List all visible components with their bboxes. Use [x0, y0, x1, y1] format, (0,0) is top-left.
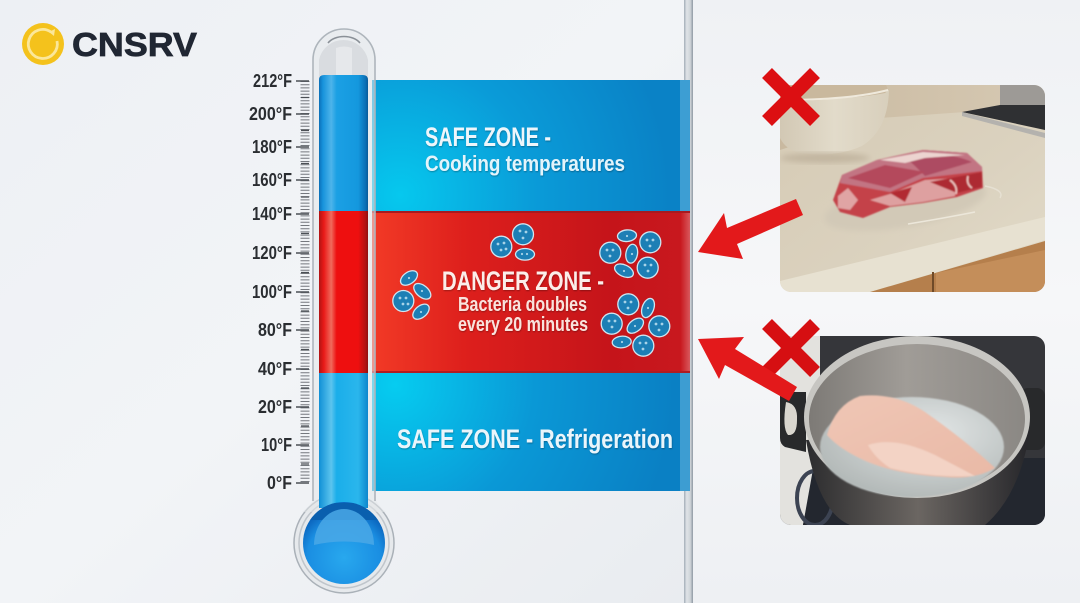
pot body — [806, 440, 1026, 525]
bowl — [780, 85, 889, 163]
water — [820, 397, 1004, 497]
thermometer bulb — [303, 502, 385, 584]
brand name: CNSRV — [72, 26, 197, 63]
safe zone: refrigeration band — [372, 373, 690, 491]
arrow: steak to danger zone — [698, 199, 803, 259]
danger zone band — [372, 211, 690, 373]
scale labels: 40°F — [258, 359, 292, 379]
temperature scale — [249, 71, 309, 493]
photo: chicken breast in boiling pot — [780, 336, 1045, 525]
mercury column: red danger section — [319, 211, 368, 373]
right handle — [1024, 388, 1045, 450]
scale labels: 212°F — [253, 71, 292, 91]
bacteria cluster: upper right — [600, 229, 661, 280]
bacteria cluster: left — [393, 268, 434, 322]
danger zone description — [458, 294, 588, 336]
scale labels — [249, 71, 292, 493]
safe zone: cooking temperatures band — [372, 80, 690, 211]
stove corner — [962, 85, 1045, 138]
bacteria cluster: lower right — [601, 294, 670, 356]
scale labels: 120°F — [252, 243, 292, 263]
bacteria cluster: top centre — [491, 224, 534, 260]
pot interior — [809, 344, 1025, 494]
danger zone description: every 20 minutes — [458, 314, 588, 336]
logo: CNSRV — [22, 23, 197, 65]
scale labels: 10°F — [261, 435, 292, 455]
scale labels: 20°F — [258, 397, 292, 417]
scale labels: 80°F — [258, 320, 292, 340]
bacteria clusters — [393, 224, 670, 356]
safe zone cooking subheading: Cooking temperatures — [425, 151, 625, 176]
danger zone description: Bacteria doubles — [458, 294, 587, 316]
steak — [833, 150, 983, 218]
icon: red X over steak — [767, 73, 815, 121]
scale labels: 100°F — [252, 282, 292, 302]
counter front edge — [780, 217, 1045, 292]
chicken breast — [827, 395, 995, 478]
pot rim — [804, 336, 1030, 498]
mercury column: upper blue — [319, 75, 368, 211]
scale labels: 200°F — [249, 104, 292, 124]
icon: yellow ring logo — [22, 23, 64, 65]
safe zone cooking heading: SAFE ZONE - — [425, 122, 551, 152]
stove glass top — [803, 458, 1045, 525]
mercury column: lower blue — [319, 373, 368, 508]
back wall — [780, 85, 1045, 150]
scale labels: 140°F — [252, 204, 292, 224]
safe zone refrigeration heading: SAFE ZONE - Refrigeration — [397, 424, 673, 454]
counter edge — [780, 336, 820, 525]
panel: temperature zones — [372, 80, 690, 491]
scale labels: 0°F — [267, 473, 292, 493]
danger zone heading: DANGER ZONE - — [442, 266, 604, 296]
glass tube and bulb outline — [294, 29, 394, 593]
juice puddle — [868, 186, 1002, 226]
vertical glass divider — [684, 0, 693, 603]
scale labels: 180°F — [252, 137, 292, 157]
photo: raw steak on kitchen counter — [780, 85, 1045, 292]
arrow: pot to danger zone — [698, 337, 797, 401]
burner ring — [797, 471, 833, 525]
scale tick marks — [296, 81, 309, 483]
thermometer — [249, 29, 394, 593]
left handle — [780, 392, 806, 452]
scale labels: 160°F — [252, 170, 292, 190]
wooden cabinet — [870, 241, 1045, 292]
icon: red X over pot — [767, 324, 815, 372]
